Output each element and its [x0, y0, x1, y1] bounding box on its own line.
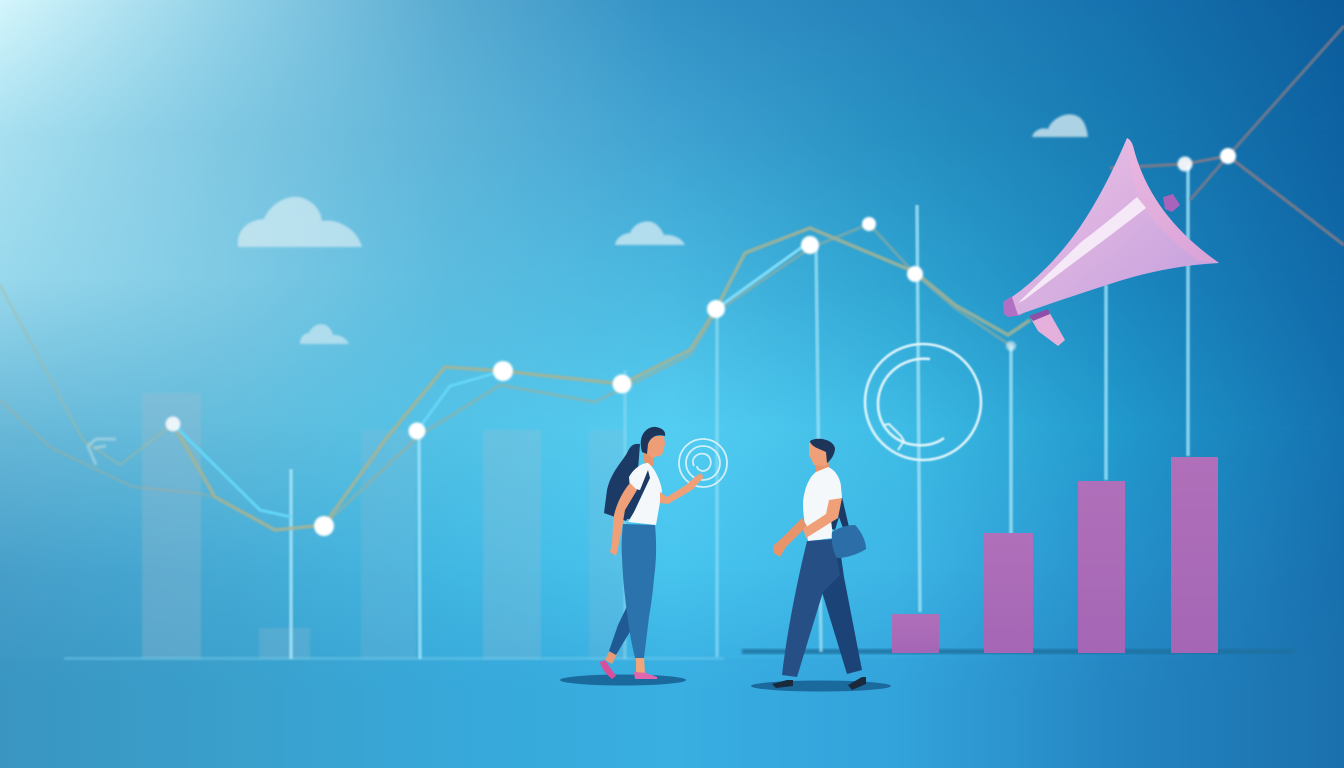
small concentric circle	[679, 439, 727, 487]
faded left trend lines	[0, 285, 173, 465]
mouthpiece	[1003, 296, 1022, 317]
woman	[560, 427, 703, 686]
ankles	[605, 650, 617, 664]
purple bars	[892, 457, 1218, 653]
right arm	[660, 473, 703, 504]
left arm	[610, 483, 637, 556]
faded background bars	[142, 393, 625, 659]
vertical marker lines	[291, 165, 1188, 659]
neck and head	[815, 460, 830, 472]
highlight	[1018, 197, 1146, 303]
shirt	[803, 467, 842, 541]
front leg	[622, 524, 656, 658]
blue trend line	[173, 424, 291, 517]
small arrow glyph on the trend line	[88, 439, 116, 465]
back leg	[609, 570, 636, 655]
horn body	[1012, 138, 1219, 315]
megaphone	[1003, 138, 1219, 346]
bag strap	[830, 497, 849, 530]
data points	[166, 148, 1236, 536]
left arm	[773, 518, 807, 557]
handle	[1030, 310, 1065, 346]
shoes	[772, 680, 793, 688]
clouds	[238, 114, 1088, 344]
large sketched circle	[865, 344, 981, 460]
olive trend line	[173, 228, 1030, 530]
man	[751, 439, 891, 692]
baseline left	[64, 657, 724, 660]
shadow	[560, 674, 686, 686]
rim	[1127, 138, 1219, 263]
right arm	[803, 498, 842, 538]
bag strap	[624, 468, 651, 520]
back leg	[820, 535, 862, 674]
cloud small	[300, 324, 349, 344]
neck and head	[643, 452, 654, 466]
trend lines	[0, 26, 1344, 530]
shoes	[600, 660, 616, 679]
shadow	[751, 680, 891, 692]
upper right trend lines	[1190, 26, 1344, 200]
cloud top right	[1032, 114, 1088, 137]
front leg	[782, 539, 840, 677]
back knob	[1163, 194, 1180, 212]
cloud large	[238, 197, 362, 247]
shoulder bag	[832, 525, 866, 558]
ponytail and backpack	[604, 444, 640, 521]
baseline right	[742, 649, 1294, 654]
cloud center	[615, 221, 685, 245]
shirt	[628, 463, 662, 525]
secondary olive trend line	[324, 224, 1011, 525]
